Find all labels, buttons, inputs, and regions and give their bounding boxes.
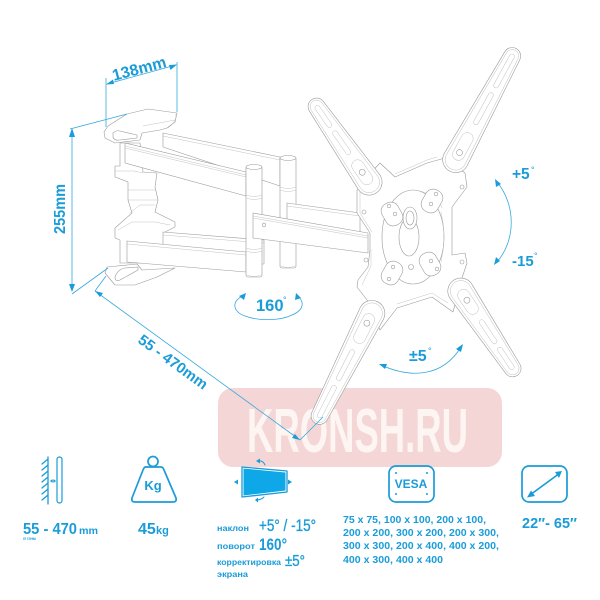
ring <box>382 190 444 284</box>
spec: screen size: 22″- 65″ <box>522 515 577 532</box>
tilt arrow: +5 / -15 degrees <box>494 165 538 270</box>
plate screw holes <box>362 185 464 264</box>
tilt arrow: +5 / -15 degrees: ° <box>531 165 535 175</box>
tilt arrow: +5 / -15 degrees: -15 <box>512 253 534 270</box>
forearm <box>253 213 368 253</box>
rear post <box>280 156 296 268</box>
swivel arrow: ±5 degrees: ° <box>428 346 432 356</box>
lower back arm <box>163 232 264 264</box>
spec: tilt and rotation: поворот <box>217 542 255 551</box>
slotted arm: lower left <box>304 296 389 429</box>
spec: VESA sizes: 300 x 300, 200 x 400, 400 x 200, <box>343 541 499 552</box>
spec: tilt and rotation <box>217 458 316 579</box>
spec: VESA sizes: 200 x 200, 300 x 200, 200 x 300, <box>343 528 499 539</box>
center hole <box>399 207 419 270</box>
rotation arrow: 160 degrees: ° <box>283 295 287 305</box>
spec: wall distance: mm <box>79 525 98 537</box>
spec: weight: kg <box>156 525 169 537</box>
dimension: 138mm: 138mm <box>111 54 168 85</box>
wall mount arm assembly <box>104 109 368 285</box>
rotation arrow: 160 degrees <box>235 293 302 320</box>
watermark: KRONSH.RU <box>218 388 502 467</box>
spec: weight: 45 <box>138 521 156 538</box>
wall bracket body <box>115 143 175 263</box>
plate outline <box>357 158 467 330</box>
spec: tilt and rotation: наклон <box>217 524 249 533</box>
dimension: 55 - 470mm <box>95 276 323 440</box>
front post <box>246 164 262 277</box>
swivel arrow: ±5 degrees <box>379 344 463 373</box>
spec: tilt and rotation: ±5° <box>285 553 305 570</box>
spec: wall distance: от стены <box>23 536 36 541</box>
spec: wall distance: 55 - 470 <box>23 521 77 538</box>
spec: VESA sizes: 75 x 75, 100 x 100, 200 x 100, <box>343 515 486 526</box>
slotted arm: lower right <box>443 273 528 383</box>
spec: wall distance <box>23 457 98 541</box>
upper front arm <box>125 143 246 196</box>
spec: VESA sizes <box>343 466 499 566</box>
bosses <box>378 186 446 288</box>
icon: tilted screen <box>234 458 292 502</box>
upper back arm <box>163 133 280 186</box>
spec: VESA sizes: 400 x 300, 400 x 400 <box>343 555 443 566</box>
spec: tilt and rotation: +5° / -15° <box>259 516 316 535</box>
icon: kettlebell weight: Kg <box>144 478 162 493</box>
dimension: 55 - 470mm: 55 - 470mm <box>135 332 211 393</box>
tilt arrow: +5 / -15 degrees: ° <box>534 251 538 261</box>
top wall plate <box>104 109 177 143</box>
spec: tilt and rotation: экрана <box>217 570 249 579</box>
lower front arm <box>127 241 246 272</box>
dimension: 255mm <box>52 114 127 294</box>
spec: tilt and rotation: корректировка <box>217 558 282 567</box>
VESA plate <box>357 157 467 330</box>
dimension: 138mm <box>106 54 177 127</box>
spec: screen size <box>522 466 577 532</box>
spec: weight <box>132 456 176 538</box>
icon: VESA <box>389 466 434 502</box>
icon: VESA: VESA <box>395 477 428 491</box>
spec: tilt and rotation: 160° <box>259 535 287 554</box>
slotted arm: upper left <box>301 92 387 200</box>
rear forearm <box>287 203 360 240</box>
slotted arm: upper right <box>438 42 528 177</box>
tilt arrow: +5 / -15 degrees: +5 <box>512 166 530 183</box>
icon: diagonal arrow <box>522 466 567 502</box>
dimension: 255mm: 255mm <box>52 184 69 234</box>
icon: wall and panel <box>42 457 62 504</box>
rotation arrow: 160 degrees: 160 <box>256 297 284 315</box>
swivel arrow: ±5 degrees: ±5 <box>409 348 427 365</box>
bottom wall plate <box>105 264 175 285</box>
